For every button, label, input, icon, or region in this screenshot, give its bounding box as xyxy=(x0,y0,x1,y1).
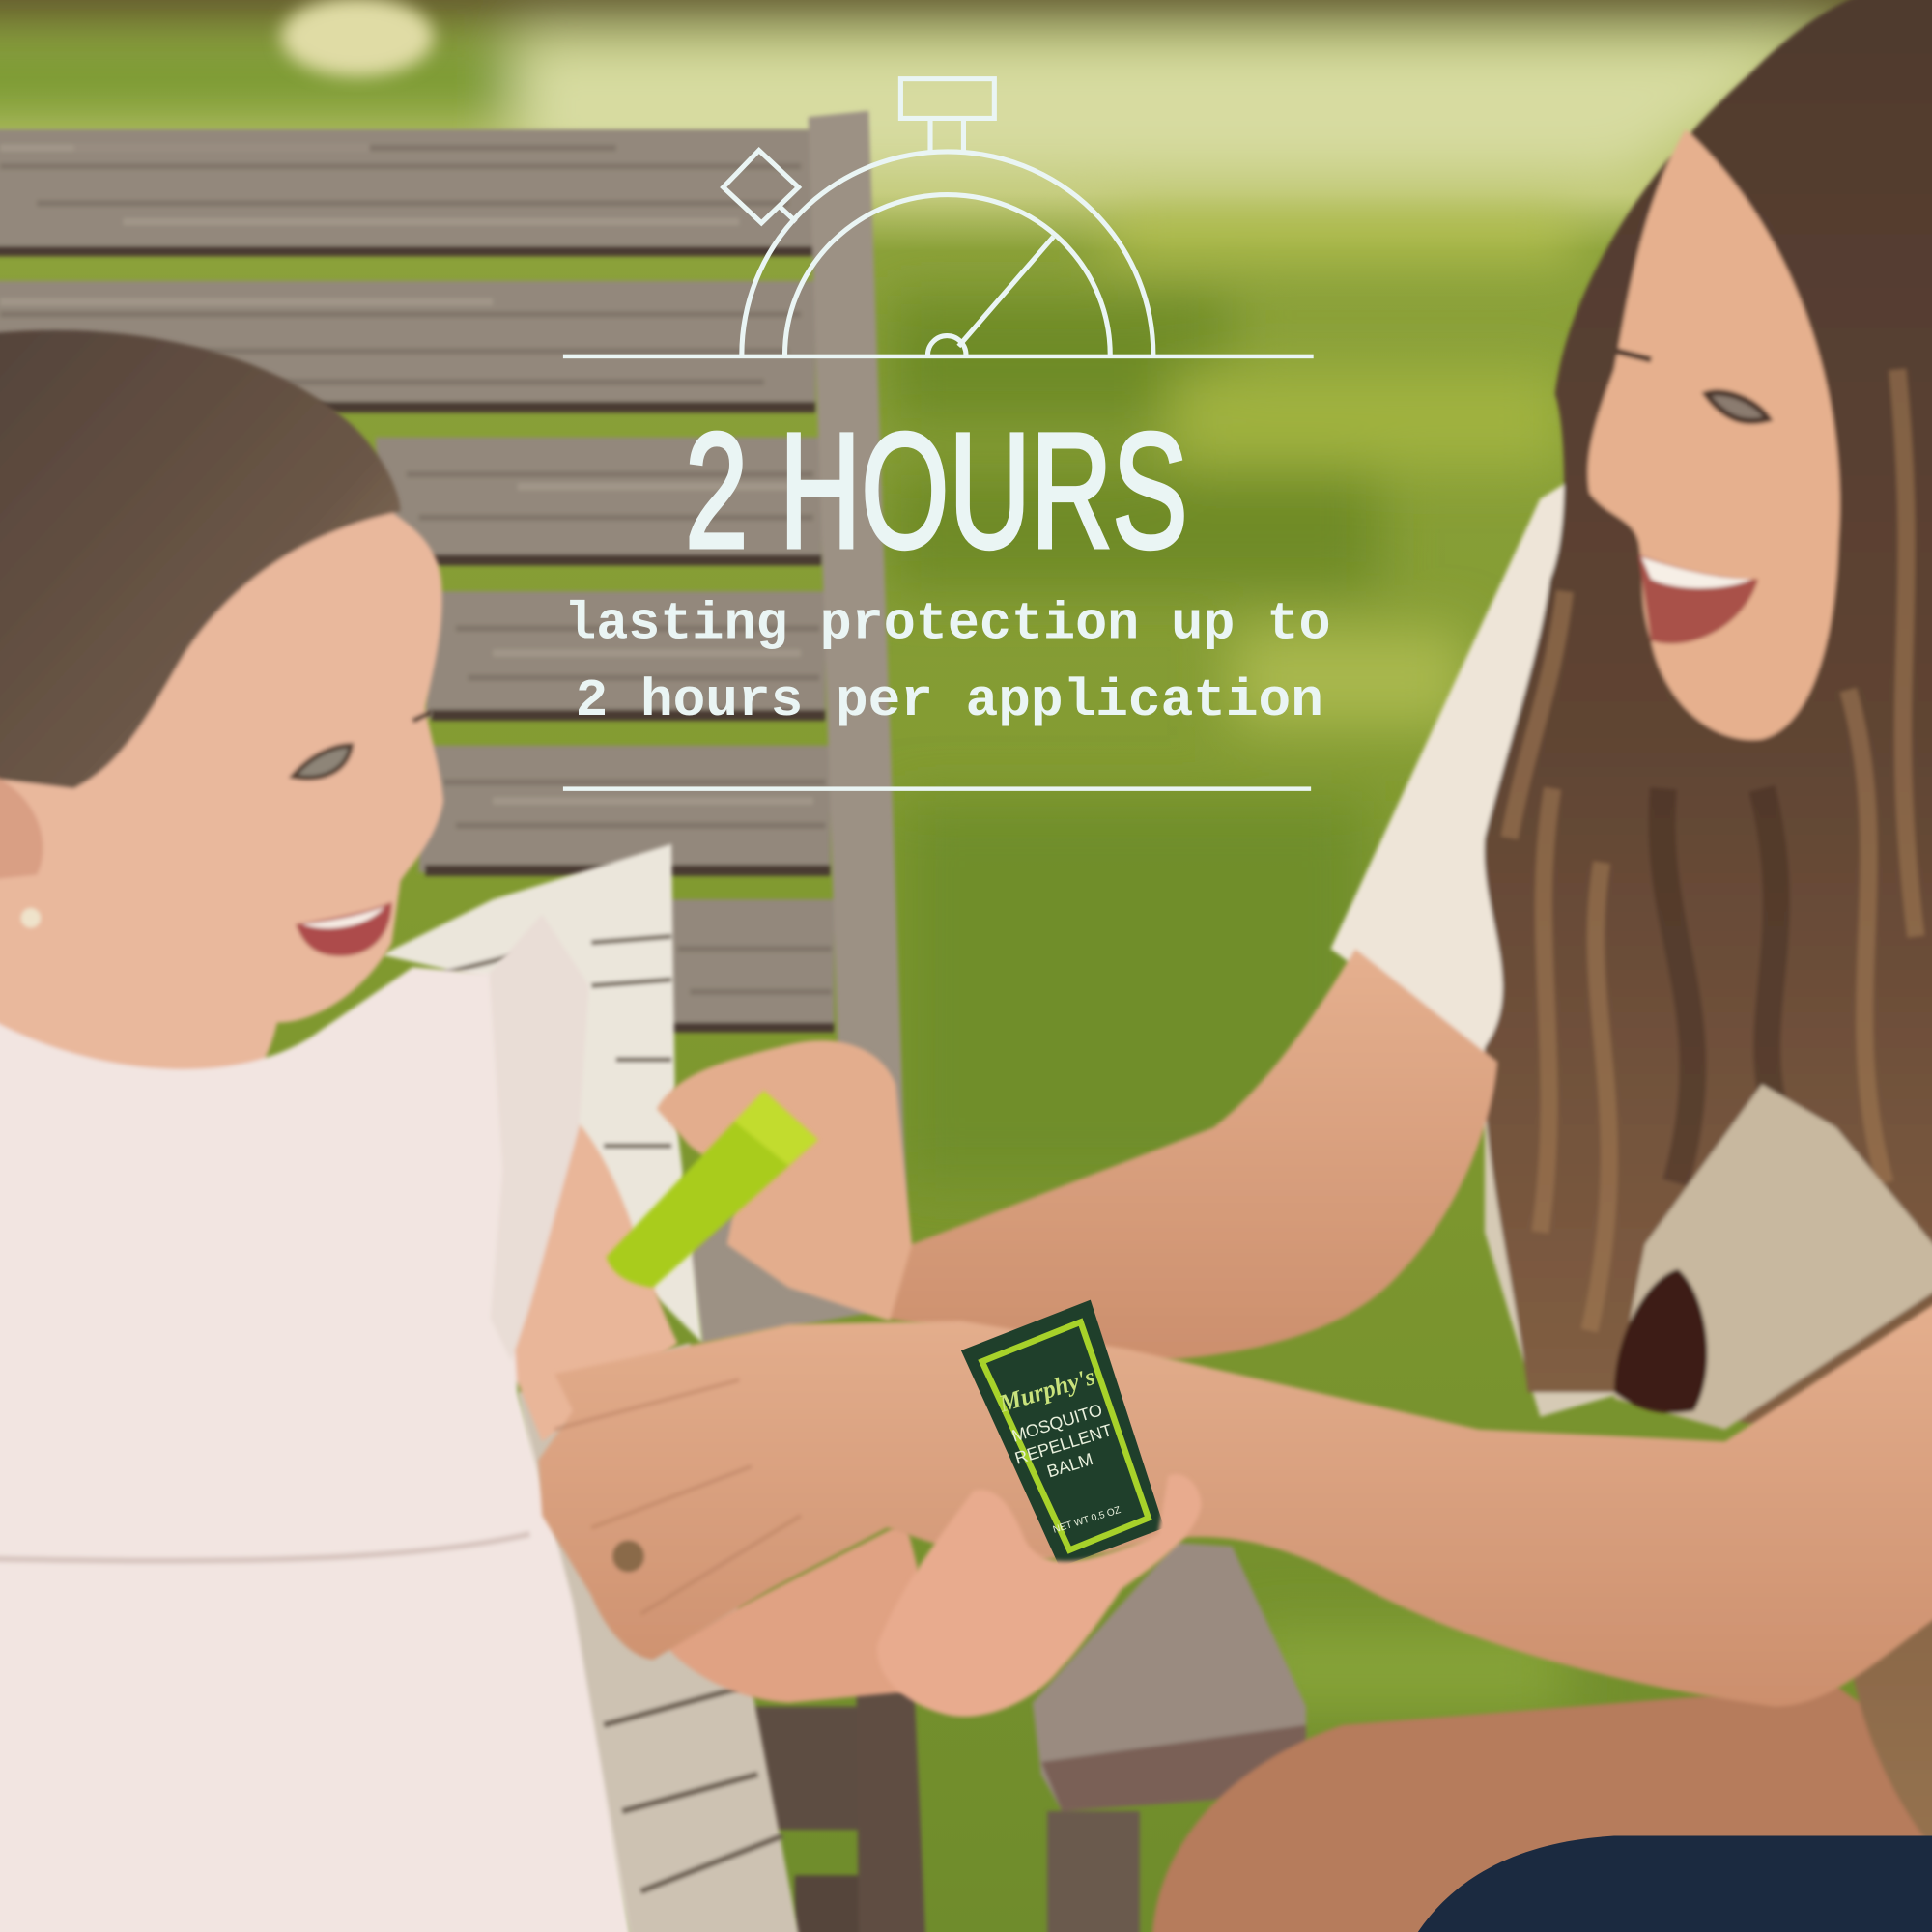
bokeh foliage xyxy=(281,0,434,76)
woman lower arm and hand xyxy=(538,1288,1932,1707)
pillow xyxy=(382,844,804,1932)
girl dress xyxy=(0,967,635,1932)
girl forearm xyxy=(666,1521,949,1703)
girl xyxy=(0,330,949,1932)
box label: MOSQUITO xyxy=(1009,1400,1105,1446)
hair highlights xyxy=(1509,370,1916,1331)
divider bottom xyxy=(563,786,1311,791)
woman xyxy=(657,0,1932,1932)
girl hair xyxy=(0,330,401,788)
girl dress ruffle xyxy=(489,914,589,1361)
box label xyxy=(995,1362,1137,1540)
divider top xyxy=(563,355,1314,358)
body text line 2: 2 hours per application xyxy=(576,671,1323,731)
girl neck and face xyxy=(0,493,443,1109)
balm box xyxy=(961,1300,1164,1567)
woman face xyxy=(1588,129,1840,740)
girl eye xyxy=(294,712,431,778)
girl hand holding box xyxy=(877,1474,1202,1717)
woman hair xyxy=(1484,0,1932,1848)
woman eye xyxy=(1616,352,1768,421)
chair post xyxy=(684,111,906,1343)
sunglasses xyxy=(1614,1269,1708,1413)
navy stool xyxy=(1403,1836,1932,1932)
girl mouth xyxy=(296,902,392,956)
girl arm xyxy=(511,1123,678,1441)
woman upper arm xyxy=(887,949,1497,1361)
box label: REPELLENT xyxy=(1012,1420,1115,1468)
chair slats xyxy=(0,129,868,1932)
lip balm stick xyxy=(607,1091,818,1288)
box label: NET WT 0.5 OZ xyxy=(1052,1505,1122,1536)
woman shirt xyxy=(1331,469,1932,1417)
box label: Murphy's xyxy=(995,1362,1098,1418)
chair armrest xyxy=(1033,1543,1306,1811)
girl ear xyxy=(0,770,43,881)
wooden chair xyxy=(0,111,1306,1932)
girl earring xyxy=(21,908,41,927)
box label: BALM xyxy=(1044,1449,1095,1481)
ring xyxy=(612,1540,644,1573)
woman mouth xyxy=(1638,554,1758,644)
finger lines xyxy=(554,1380,801,1614)
woman hand holding balm xyxy=(657,1040,912,1321)
body text line 1: lasting protection up to xyxy=(564,595,1331,655)
icon: stopwatch xyxy=(724,79,1153,355)
woman chest xyxy=(1614,1084,1932,1430)
heading: 2 HOURS: 2 HOURS xyxy=(685,398,1188,582)
woman leg xyxy=(1151,1686,1932,1932)
